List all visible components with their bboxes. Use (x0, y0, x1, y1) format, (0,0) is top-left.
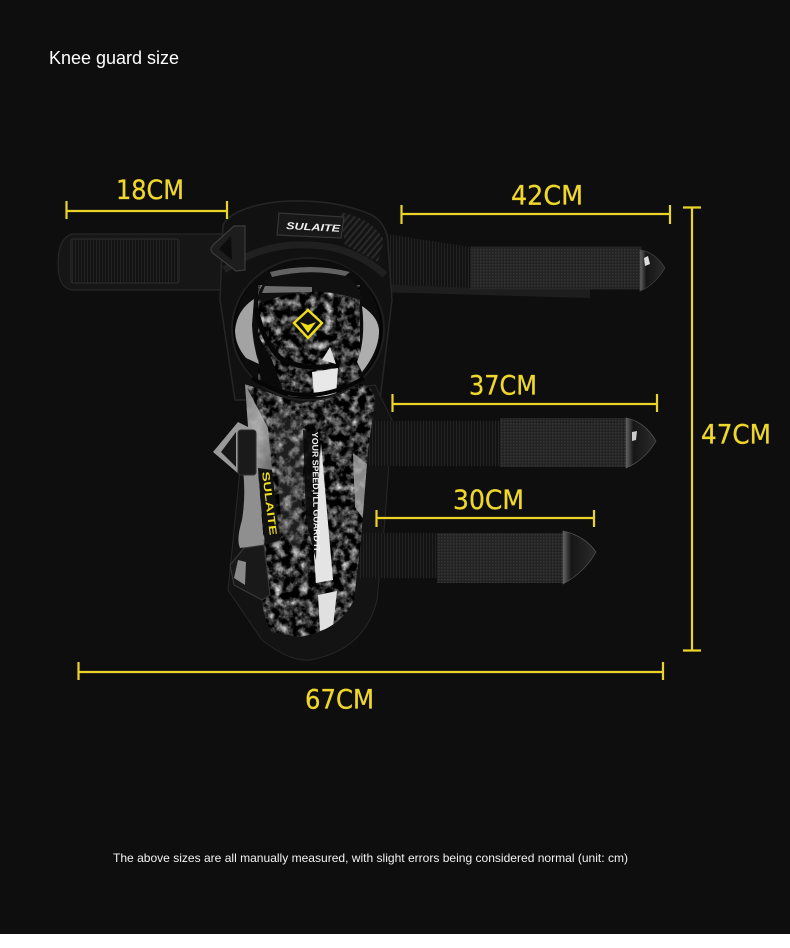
dimension: 42CM: 42CM (511, 180, 583, 212)
top dark gloss (258, 285, 360, 302)
white reflection upper (314, 443, 333, 583)
dimension: 67CM: 67CM (305, 684, 374, 716)
dimension: 47CM (683, 207, 771, 651)
white reflection lower (318, 591, 337, 631)
title: Knee guard size (49, 48, 179, 68)
dimension: 37CM: 37CM (469, 370, 537, 402)
left silver edge (245, 384, 272, 470)
bottom centre reflection (312, 368, 338, 396)
dimension: 18CM (66, 175, 227, 219)
left silver panel (235, 299, 259, 364)
dimension: 67CM (78, 662, 663, 716)
dark band behind brand text (258, 468, 280, 545)
D-ring buckle top (211, 226, 245, 271)
lighter forged zone (272, 410, 305, 560)
brand patch: SULAITE (286, 221, 341, 235)
shin slogan text: YOUR SPEED,I'LL GUARD IT (310, 432, 322, 553)
strap tip (640, 250, 665, 291)
dimension: 42CM (401, 180, 670, 224)
dimension: 30CM: 30CM (453, 485, 524, 516)
brand patch (277, 213, 344, 238)
dimension: 47CM: 47CM (701, 420, 771, 450)
shin plate (238, 384, 375, 637)
side wing (238, 470, 264, 548)
side buckle upper (213, 422, 256, 475)
knee cup (232, 258, 384, 400)
dark sweep line (256, 308, 336, 367)
dimension: 37CM (392, 370, 657, 412)
dark stripe behind slogan (303, 430, 320, 560)
right silver panel (353, 453, 367, 518)
top left strap (58, 234, 228, 290)
shin brand text: SULAITE (259, 471, 279, 536)
right silver panel (357, 306, 379, 372)
dimension: 30CM (376, 485, 594, 527)
upper knee pad (220, 201, 392, 400)
lower strap (360, 531, 596, 584)
side buckle lower (230, 545, 270, 600)
yellow shield logo (294, 310, 322, 338)
backing pad of shin guard (228, 385, 392, 660)
knee guard product illustration (58, 201, 665, 660)
footnote: The above sizes are all manually measured, with slight errors being considered normal (unit: cm) (113, 851, 628, 865)
dimension: 18CM: 18CM (116, 175, 184, 206)
cup rim (252, 378, 364, 395)
middle strap (366, 418, 656, 468)
top right strap with velcro patch (372, 232, 665, 298)
